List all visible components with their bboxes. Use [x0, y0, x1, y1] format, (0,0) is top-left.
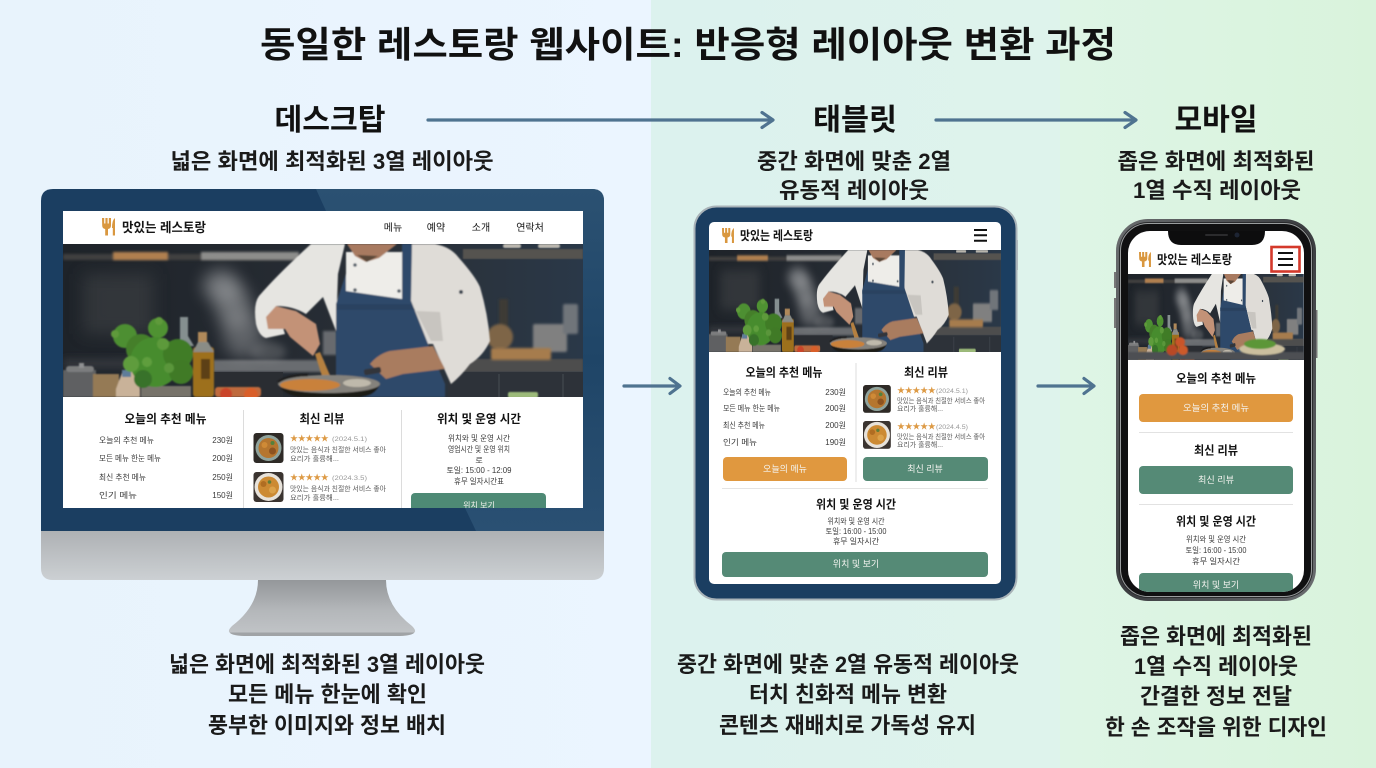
subheading: mobile: 좁은 화면에 최적화된 — [1118, 149, 1314, 174]
subheading: tablet: 중간 화면에 맞춘 2열 — [757, 149, 951, 174]
column: latest reviews: 요리가 훌륭해... — [290, 493, 339, 502]
column: recommended menu: 250원 — [212, 473, 233, 482]
desktop hero photo: chef cooking — [63, 244, 583, 402]
column: recommended menu: 최신 추천 메뉴 — [99, 472, 146, 482]
phone nav bar — [1139, 252, 1232, 267]
column: recommended menu: 오늘의 추천 메뉴 — [746, 364, 822, 380]
column: latest reviews: 최신 리뷰 — [300, 412, 344, 426]
column: recommended menu: 모든 메뉴 한눈 메뉴 — [99, 454, 161, 463]
phone notch — [1168, 231, 1265, 245]
card: latest reviews — [1139, 444, 1293, 494]
column: location and hours: 영업시간 및 운영 위치 — [448, 444, 510, 454]
caption: mobile benefits: 한 손 조작을 위한 디자인 — [1105, 715, 1327, 740]
arrow: desktop to tablet — [428, 112, 773, 128]
column: recommended menu: 230원 — [212, 436, 233, 445]
subheading: tablet: 유동적 레이아웃 — [779, 178, 929, 203]
button: today's menu: 오늘의 메뉴 — [763, 464, 807, 474]
caption: tablet benefits — [677, 652, 1019, 738]
tablet hero photo: chef cooking — [709, 250, 1001, 355]
column: latest reviews: (2024.5.1) — [936, 388, 968, 395]
column: location and hours: 위치와 및 운영 시간 — [448, 433, 511, 443]
card: location and hours: 위치 및 보기 — [1193, 579, 1239, 590]
column: latest reviews: 맛있는 음식과 친절한 서비스 좋아 — [897, 432, 985, 441]
button: view location — [722, 552, 988, 577]
caption: mobile benefits: 좁은 화면에 최적화된 — [1120, 624, 1312, 649]
caption: desktop benefits: 모든 메뉴 한눈에 확인 — [228, 682, 427, 707]
column: latest reviews: 맛있는 음식과 친절한 서비스 좋아 — [290, 445, 386, 454]
section: location and hours: 위치와 및 운영 시간 — [828, 516, 885, 526]
monitor chin — [41, 531, 604, 580]
subheading: mobile — [1118, 149, 1314, 203]
column: location and hours: 휴무 일자시간표 — [454, 476, 504, 486]
arrow: tablet to mobile — [936, 112, 1136, 128]
phone nav bar: 맛있는 레스토랑 — [1157, 252, 1232, 267]
card: location and hours — [1139, 515, 1293, 592]
tablet content — [722, 363, 988, 577]
desktop nav bar: 예약 — [427, 222, 445, 234]
column: recommended menu — [723, 364, 847, 481]
desktop nav bar — [102, 218, 544, 236]
column: latest reviews: 요리가 훌륭해... — [897, 440, 943, 449]
column: latest reviews — [863, 366, 988, 481]
phone hero photo: chef cooking — [1128, 274, 1304, 363]
caption: tablet benefits: 콘텐츠 재배치로 가독성 유지 — [719, 713, 976, 738]
column: location and hours — [411, 412, 546, 517]
title: 동일한 레스토랑 웹사이트: 반응형 레이아웃 변환 과정 — [260, 24, 1116, 65]
section: location and hours: 토일: 16:00 - 15:00 — [826, 527, 887, 536]
desktop content columns — [99, 410, 546, 517]
monitor bezel — [41, 189, 604, 531]
section: location and hours: 휴무 일자시간 — [833, 536, 880, 546]
desktop nav bar: 연락처 — [516, 222, 544, 234]
column: recommended menu: 인기 메뉴 — [99, 490, 137, 500]
column: recommended menu: 200원 — [825, 404, 846, 413]
column: latest reviews: (2024.5.1) — [332, 436, 367, 443]
column: recommended menu: 200원 — [825, 421, 846, 430]
column: location and hours: 로 — [475, 456, 483, 465]
phone screen — [1128, 231, 1304, 601]
column: latest reviews: 맛있는 음식과 친절한 서비스 좋아 — [897, 396, 985, 405]
subheading: mobile: 1열 수직 레이아웃 — [1133, 178, 1301, 203]
section: location and hours — [722, 498, 988, 577]
card: recommended menu: 오늘의 추천 메뉴 — [1176, 370, 1256, 386]
column: recommended menu — [99, 411, 233, 500]
heading: tablet: 태블릿 — [813, 104, 897, 137]
caption: mobile benefits — [1105, 624, 1327, 740]
column: recommended menu: 190원 — [825, 438, 846, 447]
arrow: desktop to tablet layout — [624, 378, 680, 394]
column: location and hours: 위치 보기 — [463, 501, 495, 510]
column: recommended menu: 200원 — [212, 454, 233, 463]
button: latest reviews: 최신 리뷰 — [907, 464, 943, 474]
column: location and hours: 토일: 15:00 - 12:09 — [446, 466, 512, 475]
column: location and hours: 위치 및 운영 시간 — [437, 412, 521, 426]
card: latest reviews: 최신 리뷰 — [1198, 475, 1234, 485]
panel: desktop monitor — [41, 189, 604, 636]
subheading: tablet — [757, 149, 951, 203]
monitor stand — [229, 580, 415, 636]
card: location and hours: 위치 및 운영 시간 — [1176, 514, 1256, 528]
card: recommended menu — [1139, 370, 1293, 422]
card: latest reviews: 최신 리뷰 — [1194, 444, 1238, 458]
caption: desktop benefits: 풍부한 이미지와 정보 배치 — [208, 713, 446, 738]
caption: desktop benefits: 넓은 화면에 최적화된 3열 레이아웃 — [169, 652, 485, 677]
column: recommended menu: 오늘의 추천 메뉴 — [124, 411, 206, 426]
desktop nav bar: 소개 — [472, 222, 490, 234]
arrow: tablet to mobile layout — [1038, 378, 1094, 394]
card: location and hours: 위치와 및 운영 시간 — [1186, 534, 1247, 544]
heading: mobile: 모바일 — [1174, 104, 1258, 137]
column: latest reviews: 요리가 훌륭해... — [897, 404, 943, 413]
caption: mobile benefits: 간결한 정보 전달 — [1140, 684, 1292, 709]
desktop nav bar: 메뉴 — [384, 222, 402, 234]
panel: mobile phone — [1114, 219, 1318, 601]
tablet nav bar — [722, 228, 987, 243]
card: location and hours: 토일: 16:00 - 15:00 — [1186, 546, 1247, 555]
section: location and hours: 위치 및 운영 시간 — [816, 498, 896, 512]
column: recommended menu: 인기 메뉴 — [723, 437, 757, 447]
column: recommended menu: 오늘의 추천 메뉴 — [723, 387, 771, 397]
column: recommended menu: 최신 추천 메뉴 — [723, 420, 765, 430]
tablet nav bar: 맛있는 레스토랑 — [740, 228, 813, 243]
column: latest reviews — [254, 412, 386, 502]
desktop screen — [63, 211, 583, 517]
heading: desktop: 데스크탑 — [274, 104, 386, 137]
column: recommended menu: 오늘의 추천 메뉴 — [99, 435, 154, 445]
column: latest reviews: (2024.3.5) — [332, 475, 367, 482]
column: recommended menu: 230원 — [825, 388, 846, 397]
button: view location: 위치 및 보기 — [833, 558, 879, 569]
caption: desktop benefits — [169, 652, 485, 738]
card: recommended menu: 오늘의 추천 메뉴 — [1183, 403, 1249, 413]
column: recommended menu: 150원 — [212, 491, 233, 500]
highlighted hamburger menu — [1272, 247, 1300, 272]
caption: tablet benefits: 중간 화면에 맞춘 2열 유동적 레이아웃 — [677, 652, 1019, 677]
caption: tablet benefits: 터치 친화적 메뉴 변환 — [749, 682, 947, 707]
column: latest reviews: 요리가 훌륭해... — [290, 454, 339, 463]
column: latest reviews: (2024.4.5) — [936, 424, 968, 431]
column: latest reviews: 최신 리뷰 — [904, 366, 948, 380]
desktop nav bar: 맛있는 레스토랑 — [122, 220, 206, 235]
column: recommended menu: 모든 메뉴 한눈 메뉴 — [723, 404, 780, 413]
column: latest reviews: 맛있는 음식과 친절한 서비스 좋아 — [290, 484, 386, 493]
card: location and hours: 휴무 일자시간 — [1192, 556, 1241, 566]
panel: tablet device — [694, 206, 1018, 600]
caption: mobile benefits: 1열 수직 레이아웃 — [1134, 654, 1298, 679]
subheading: desktop: 넓은 화면에 최적화된 3열 레이아웃 — [170, 149, 494, 174]
tablet screen — [709, 222, 1001, 584]
